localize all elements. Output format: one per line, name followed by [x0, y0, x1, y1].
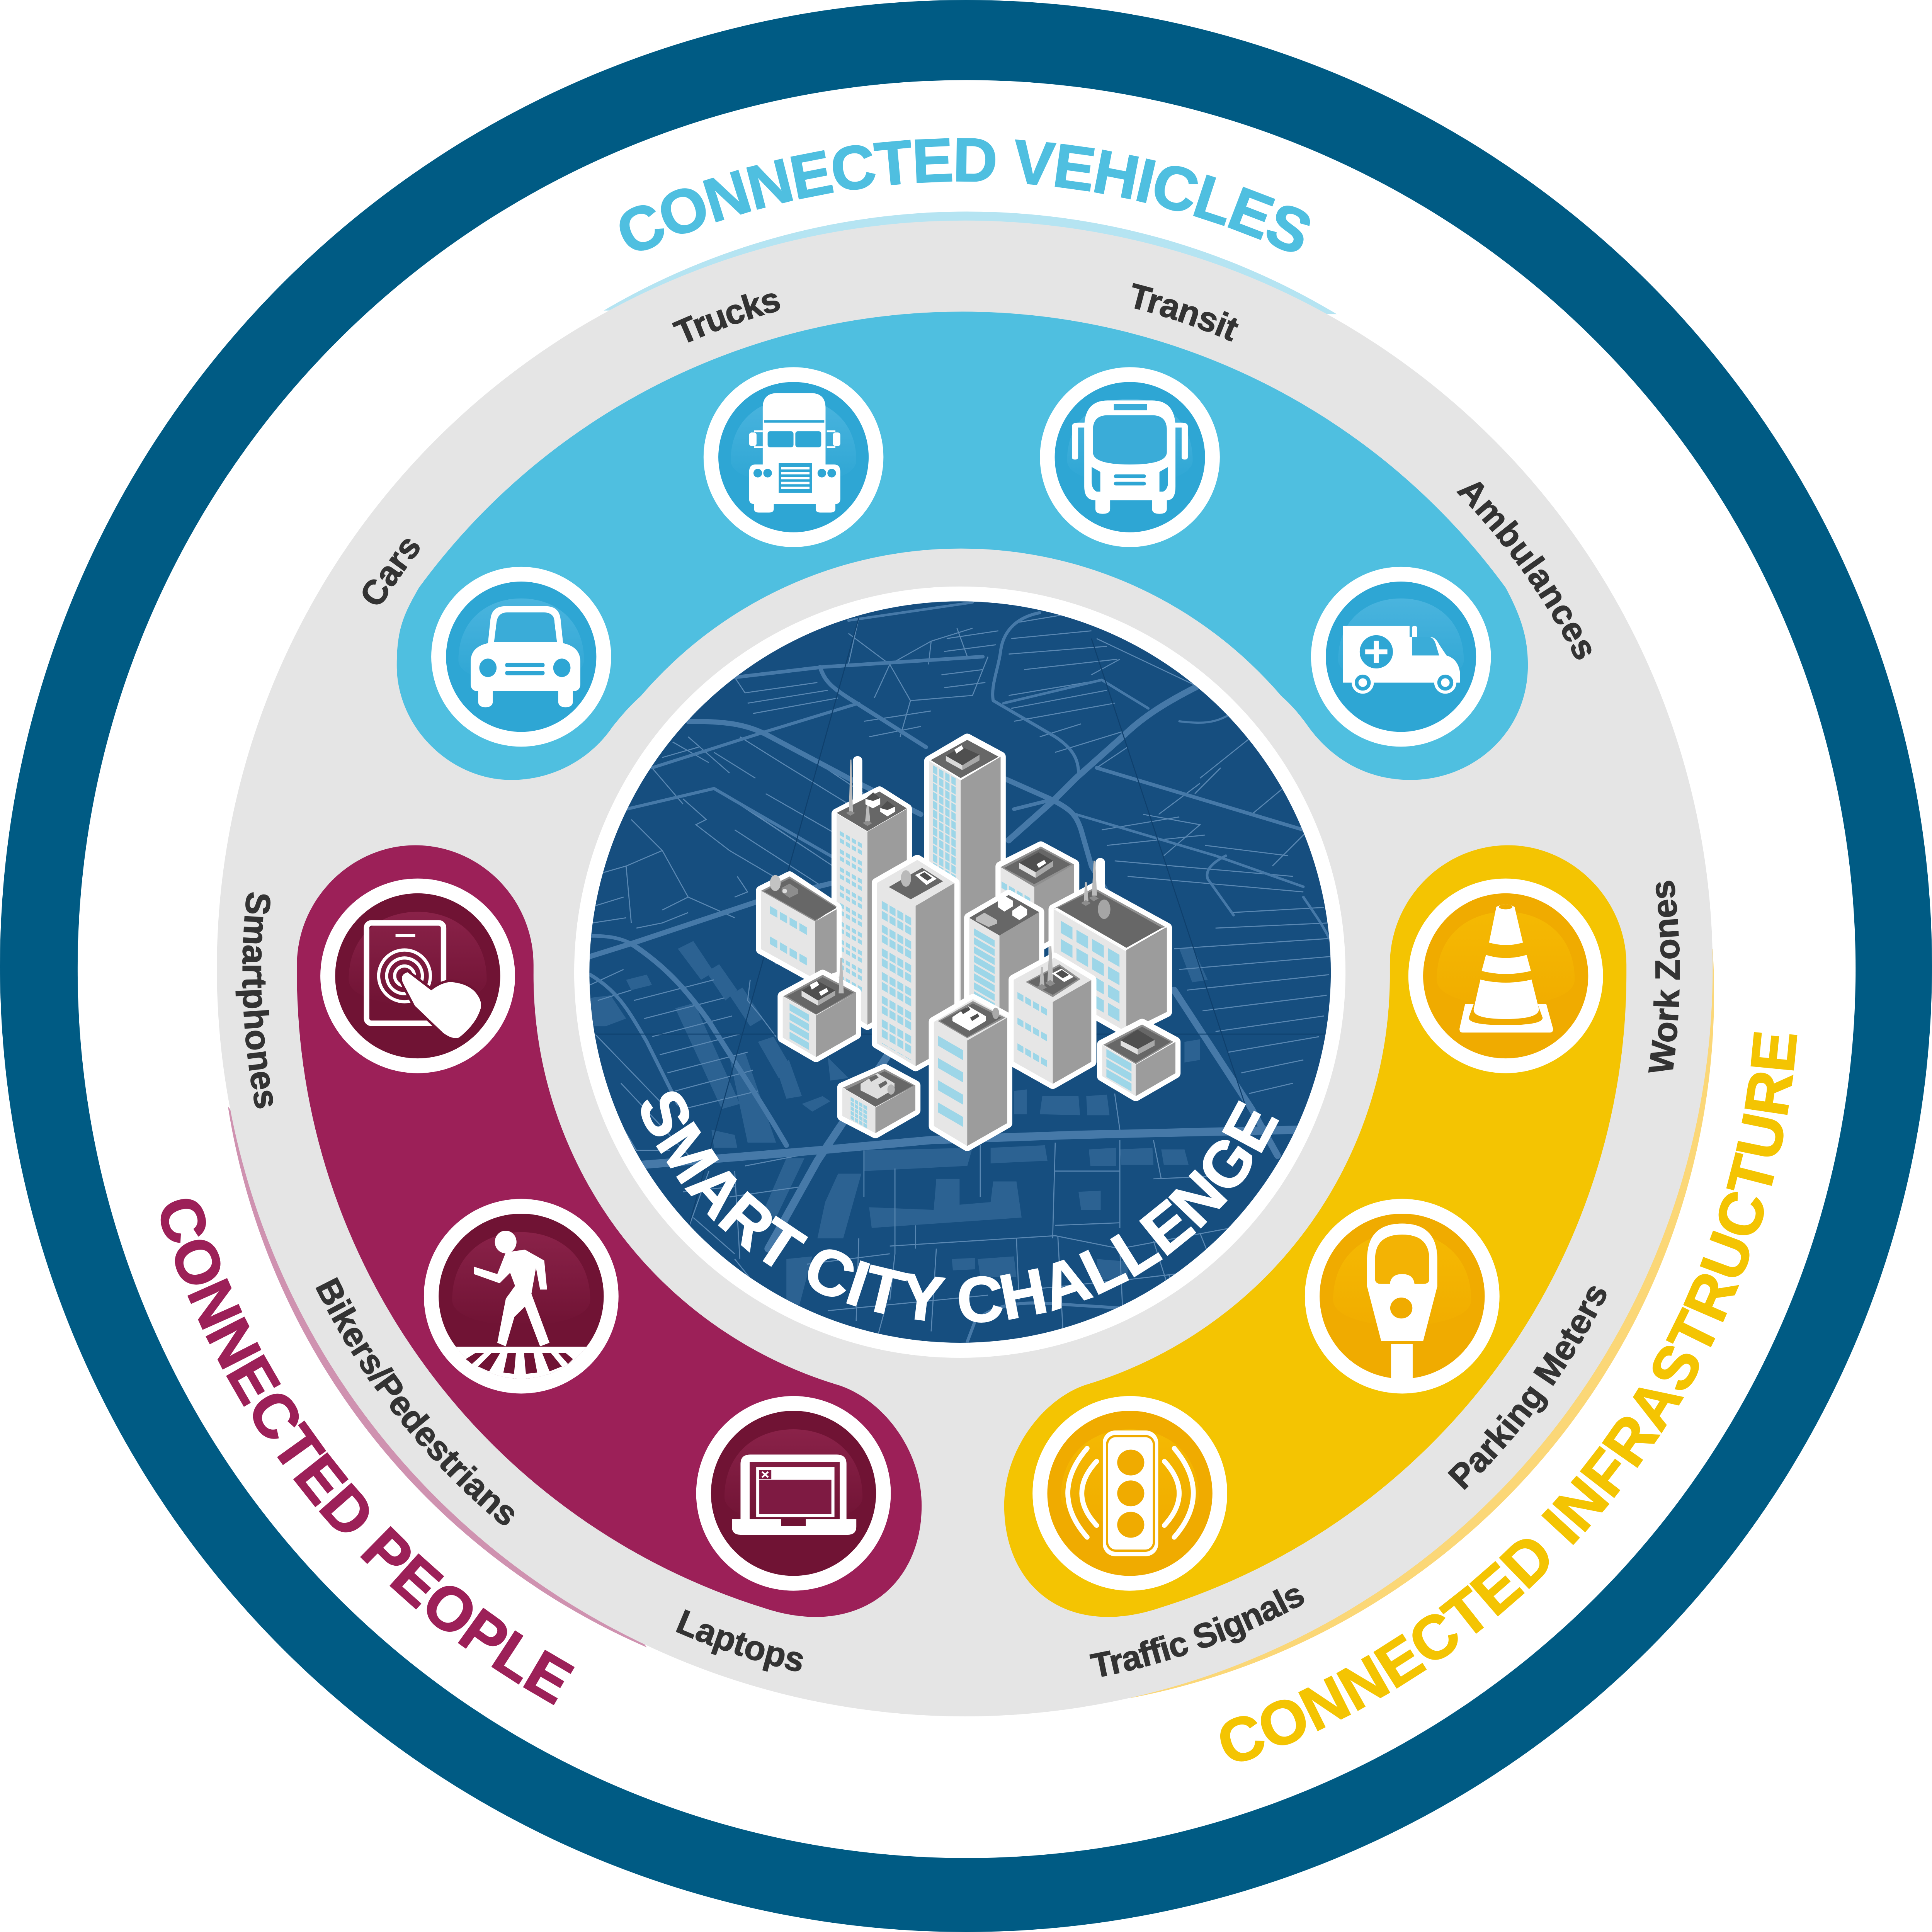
grey ring panel [217, 221, 1713, 1716]
panel: connected vehicles band [397, 312, 1528, 780]
crescent: connected people [228, 1107, 647, 1647]
building: center right tower [969, 895, 1039, 1037]
building: back right low block [1001, 847, 1074, 949]
heading: connected infrastructure: CONNECTED INFRASTRUCTURE [1186, 998, 1922, 1866]
icon: transit bus [1040, 367, 1220, 547]
icon: truck [704, 367, 883, 547]
label: work zones: Work Zones [1641, 878, 1687, 1076]
icon: laptop [696, 1396, 891, 1591]
icon: smartphone touch [320, 879, 515, 1073]
icon: traffic signal [1032, 1396, 1227, 1591]
building: bottom small block [842, 1069, 915, 1133]
heading: connected people: CONNECTED PEOPLE [93, 1169, 599, 1757]
building: front middle tower [877, 860, 954, 1066]
icon: pedestrian crossing [424, 1199, 619, 1394]
label: parking meters: Parking Meters [1437, 1272, 1624, 1503]
label: cars: Cars [351, 527, 429, 615]
label: transit: Transit [1123, 274, 1245, 349]
crescent: connected vehicles [604, 212, 1337, 314]
panel: connected people band [297, 845, 922, 1617]
isometric city buildings [761, 739, 1175, 1146]
city map [580, 601, 1331, 1343]
center white disc [574, 587, 1345, 1358]
building: right front tower [1014, 946, 1091, 1084]
building: tall center tower [929, 739, 1001, 1003]
label: smartphones: Smartphones [231, 889, 287, 1112]
heading: connected vehicles: CONNECTED VEHICLES [606, 125, 1320, 269]
label: ambulances: Ambulances [1448, 465, 1612, 670]
icon: car [431, 567, 611, 747]
panel: connected infrastructure band [1004, 845, 1626, 1617]
icon: parking meter [1305, 1199, 1500, 1394]
label: bikers/pedestrians: Bikers/Pedestrians [295, 1266, 531, 1544]
building: front center tower [934, 999, 1007, 1146]
label: traffic signals: Traffic Signals [1083, 1573, 1313, 1694]
crescent: connected infrastructure [1131, 949, 1714, 1698]
label: trucks: Trucks [668, 277, 786, 353]
label: laptops: Laptops [670, 1601, 811, 1683]
icon: ambulance [1311, 567, 1491, 747]
building: left tower [837, 756, 907, 1025]
building: right small block [1102, 1024, 1175, 1096]
icon: traffic cone [1408, 879, 1603, 1073]
building: front left small block [783, 958, 856, 1057]
building: large right block [1054, 858, 1167, 1032]
heading: smart city challenge: SMART CITY CHALLENGE [619, 1077, 1293, 1344]
building: left low block [761, 875, 837, 979]
